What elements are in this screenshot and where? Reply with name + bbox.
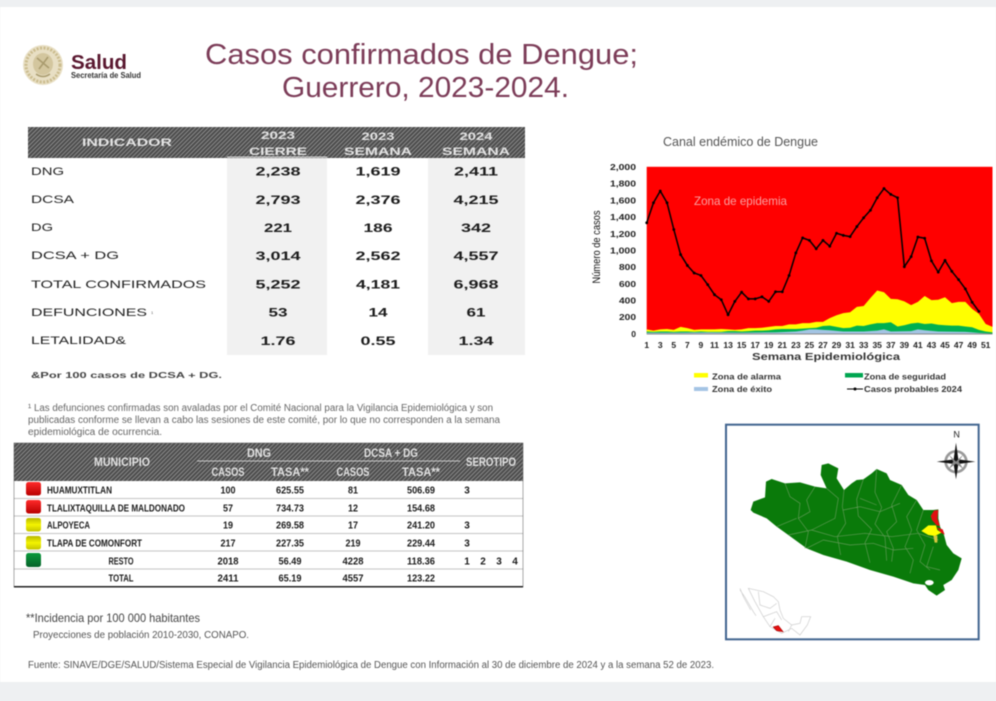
table values: 4,557 xyxy=(454,249,499,263)
icon: compass rose xyxy=(937,430,975,479)
logo: Secretaría de Salud xyxy=(23,45,141,85)
table values: 2,411 xyxy=(454,164,498,178)
municipality rows: HUAMUXTITLAN xyxy=(47,486,112,496)
row labels: DEFUNCIONES xyxy=(31,307,147,319)
x axis: 1 xyxy=(644,340,649,350)
table header: SEMANA xyxy=(344,146,412,158)
y axis: 1,000 xyxy=(610,246,636,256)
table values: 4,215 xyxy=(454,193,499,207)
x axis: 11 xyxy=(710,340,719,350)
municipality rows: 3 xyxy=(464,520,470,532)
y axis: 1,600 xyxy=(610,195,636,205)
municipality rows: TLAPA DE COMONFORT xyxy=(47,538,142,550)
municipality rows: ALPOYECA xyxy=(47,520,90,532)
table header xyxy=(28,127,525,158)
x axis: 21 xyxy=(778,340,787,350)
x axis: Semana Epidemiológica xyxy=(752,351,900,363)
logo: Secretaría de Salud: Salud xyxy=(71,52,127,74)
y axis: 600 xyxy=(619,279,636,289)
municipality rows: 4557 xyxy=(342,574,364,584)
municipality rows: 65.19 xyxy=(278,574,302,584)
notes: incidence and population xyxy=(26,611,249,641)
municipality rows: 4228 xyxy=(342,556,364,568)
municipality rows: 734.73 xyxy=(276,504,304,514)
alert municipalities xyxy=(921,510,945,543)
table header: 2024 xyxy=(460,131,494,143)
y axis: 1,800 xyxy=(610,179,636,189)
municipality table header: TASA** xyxy=(271,465,309,479)
table values: 2,376 xyxy=(356,193,401,207)
x axis: 3 xyxy=(658,340,663,350)
row labels: DG xyxy=(31,222,53,234)
x axis: 15 xyxy=(737,340,747,350)
x axis: 41 xyxy=(913,340,923,350)
footnote: deaths: ¹ Las defunciones confirmadas son avaladas por el Comité Nacional para la Vigilancia Epidemiológica y son xyxy=(28,403,493,414)
table values: 221 xyxy=(264,221,292,235)
row labels: TOTAL CONFIRMADOS xyxy=(31,279,206,291)
municipality rows: 19 xyxy=(223,520,233,532)
table values: 3,014 xyxy=(256,249,301,263)
row labels: DCSA + DG xyxy=(31,250,119,262)
x axis: 29 xyxy=(832,340,841,350)
panel: municipality table xyxy=(14,443,523,588)
row labels: DNG xyxy=(31,166,64,178)
x axis: 33 xyxy=(859,340,869,350)
x axis: 27 xyxy=(818,340,828,350)
endemic channel chart xyxy=(591,162,992,394)
y axis: 2,000 xyxy=(610,162,636,172)
municipality rows: 57 xyxy=(223,504,233,514)
table values: 1.76 xyxy=(260,334,296,348)
municipality table header: DNG xyxy=(247,446,271,460)
table values: 5,252 xyxy=(256,278,301,292)
table header: 2023 xyxy=(261,130,295,142)
y axis: 0 xyxy=(631,329,636,339)
y axis xyxy=(591,162,636,339)
title xyxy=(205,39,638,104)
x axis: 43 xyxy=(927,340,936,350)
x axis: 49 xyxy=(967,340,977,350)
y axis: 800 xyxy=(619,262,636,272)
row labels: DCSA xyxy=(31,194,75,206)
x axis: 13 xyxy=(723,340,733,350)
title: Casos confirmados de Dengue; xyxy=(205,39,638,71)
table header: CIERRE xyxy=(249,146,307,158)
municipality rows: 118.36 xyxy=(407,556,435,568)
x axis: 5 xyxy=(671,340,676,350)
title: Guerrero, 2023-2024. xyxy=(282,72,569,104)
municipality rows: 100 xyxy=(220,486,236,496)
municipality rows: 1 xyxy=(464,556,470,568)
x axis: 31 xyxy=(845,340,855,350)
y axis: 200 xyxy=(619,312,636,322)
municipality rows: 123.22 xyxy=(407,574,435,584)
table values: 14 xyxy=(368,306,388,320)
table values xyxy=(256,164,499,348)
state map xyxy=(751,463,962,596)
table header: SEMANA xyxy=(442,146,510,158)
municipality rows xyxy=(47,486,518,584)
note: lethality base: &Por 100 casos de DCSA + DG. xyxy=(31,370,222,380)
source line: Fuente: SINAVE/DGE/SALUD/Sistema Especial de Vigilancia Epidemiológica de Dengue con Información al 30 de diciembre de 2024 y a la semana 52 de 2023. xyxy=(28,660,714,671)
municipality rows: 217 xyxy=(220,538,236,550)
municipality rows: 12 xyxy=(348,504,358,514)
municipality rows: 506.69 xyxy=(407,486,435,496)
footnote: deaths: epidemiológica de ocurrencia. xyxy=(28,427,162,438)
chart title: Canal endémico de Dengue xyxy=(663,134,818,149)
y axis: Número de casos xyxy=(591,210,603,284)
legend xyxy=(694,372,963,394)
x axis: 25 xyxy=(805,340,814,350)
municipality table header xyxy=(14,443,523,481)
municipality rows: 4 xyxy=(512,556,518,568)
table header: INDICADOR xyxy=(82,137,172,149)
municipality rows: 219 xyxy=(346,538,361,550)
y axis: 400 xyxy=(619,296,636,306)
municipality rows: 17 xyxy=(348,520,358,532)
municipality rows: RESTO xyxy=(108,556,134,568)
zone label: Zona de epidemia xyxy=(694,194,787,208)
x axis: 23 xyxy=(791,340,801,350)
municipality rows: TOTAL xyxy=(108,574,134,584)
inset: map of Mexico xyxy=(740,588,811,635)
municipality rows: TLALIXTAQUILLA DE MALDONADO xyxy=(47,504,185,514)
traffic-light icons xyxy=(26,482,41,567)
municipality rows: 3 xyxy=(464,538,470,550)
municipality rows: 3 xyxy=(496,556,502,568)
table values: 2,238 xyxy=(256,164,301,178)
x axis xyxy=(644,340,991,363)
panel: indicator table xyxy=(28,127,525,355)
icon: compass rose: N xyxy=(953,430,960,440)
legend: Zona de seguridad xyxy=(864,372,946,382)
row labels: 1 xyxy=(151,310,154,315)
municipality rows: 56.49 xyxy=(278,556,302,568)
x axis: 9 xyxy=(699,340,704,350)
legend: Zona de alarma xyxy=(712,372,782,382)
table header: 2023 xyxy=(362,131,394,143)
row labels xyxy=(31,166,206,347)
municipality rows: 241.20 xyxy=(407,520,435,532)
municipality rows: 2411 xyxy=(218,574,239,584)
x axis: 47 xyxy=(954,340,964,350)
municipality table header: TASA** xyxy=(402,465,440,479)
epidemic zone xyxy=(647,167,992,334)
municipality rows: 81 xyxy=(348,486,358,496)
notes: incidence and population: **Incidencia por 100 000 habitantes xyxy=(26,611,200,625)
table values: 1.34 xyxy=(458,334,494,348)
notes: incidence and population: Proyecciones de población 2010-2030, CONAPO. xyxy=(33,630,249,641)
x axis: 51 xyxy=(981,340,991,350)
municipality rows: 3 xyxy=(464,486,470,496)
table values: 2,793 xyxy=(256,193,301,207)
x axis: 35 xyxy=(872,340,882,350)
municipality rows: 229.44 xyxy=(407,538,435,550)
municipality table header: DCSA + DG xyxy=(364,446,418,460)
x axis: 17 xyxy=(750,340,760,350)
table values: 0.55 xyxy=(360,334,396,348)
x axis: 39 xyxy=(900,340,909,350)
municipality table header: SEROTIPO xyxy=(466,455,516,469)
table values: 2,562 xyxy=(356,249,401,263)
footnote: deaths: publicadas conforme se llevan a cabo las sesiones de este comité, por lo que no corresponden a la semana xyxy=(28,415,500,426)
municipality rows: 154.68 xyxy=(407,504,435,514)
x axis: 7 xyxy=(685,340,690,350)
logo: Secretaría de Salud: Secretaría de Salud xyxy=(71,71,141,80)
municipality table header: MUNICIPIO xyxy=(94,455,150,469)
footnote: deaths xyxy=(28,403,500,438)
y axis: 1,200 xyxy=(610,229,636,239)
municipality rows: 2018 xyxy=(218,556,239,568)
x axis: 37 xyxy=(886,340,896,350)
municipality rows: 269.58 xyxy=(276,520,304,532)
table values: 1,619 xyxy=(356,164,401,178)
legend: Casos probables 2024 xyxy=(864,385,963,394)
table values: 6,968 xyxy=(454,278,499,292)
table values: 61 xyxy=(466,306,486,320)
municipality rows: 227.35 xyxy=(276,538,304,550)
panel: map of Guerrero xyxy=(726,425,979,639)
plot areas and line xyxy=(647,189,992,334)
table values: 4,181 xyxy=(356,278,400,292)
y axis: 1,400 xyxy=(610,212,636,222)
x axis: 19 xyxy=(764,340,774,350)
table values: 53 xyxy=(268,306,288,320)
municipality rows: 2 xyxy=(480,556,486,568)
municipality rows: 625.55 xyxy=(276,486,304,496)
x axis: 45 xyxy=(940,340,950,350)
table values: 342 xyxy=(461,221,491,235)
row labels: LETALIDAD& xyxy=(31,335,127,347)
municipality table header: CASOS xyxy=(336,465,370,479)
legend: Zona de éxito xyxy=(712,385,772,394)
municipality table header: CASOS xyxy=(212,465,244,479)
table values: 186 xyxy=(364,221,393,235)
